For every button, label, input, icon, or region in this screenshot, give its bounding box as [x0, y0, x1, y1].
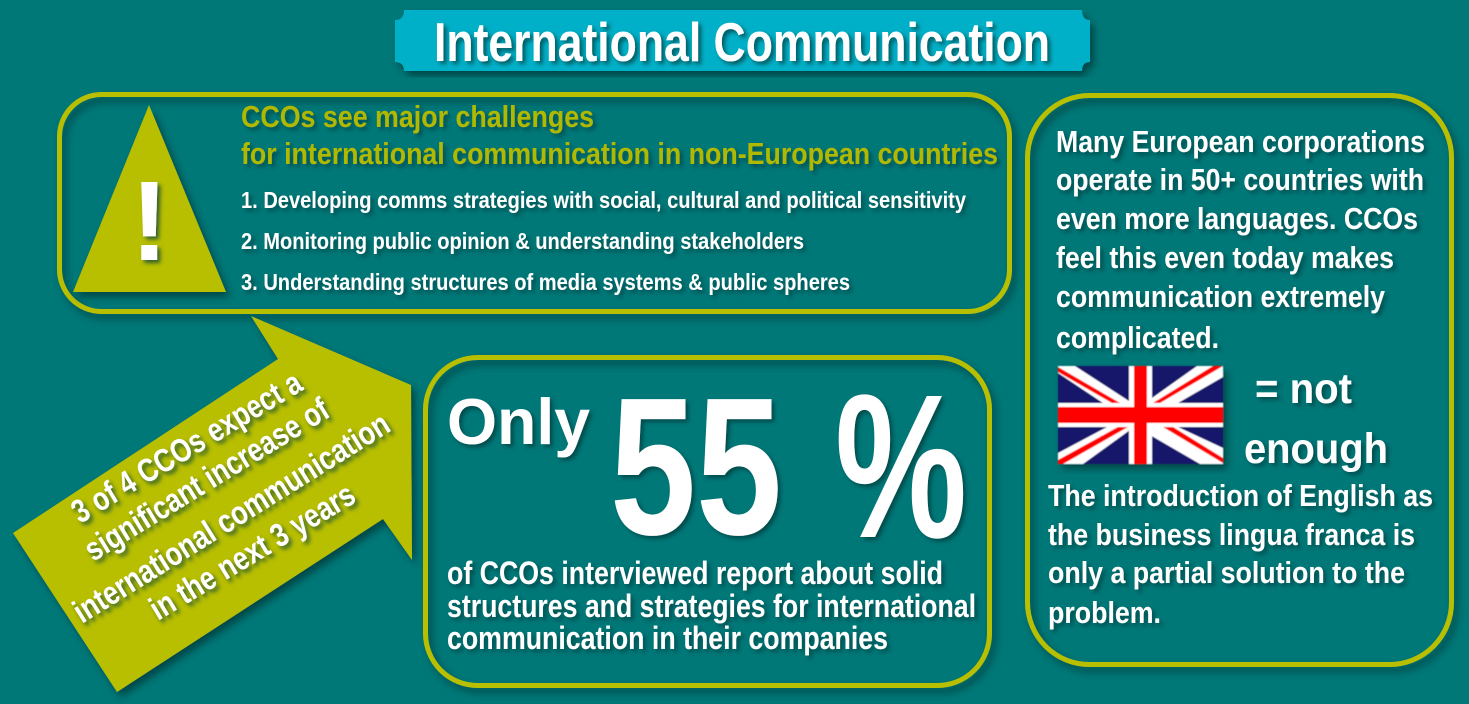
big number: 55	[610, 357, 782, 576]
percent sign: %	[835, 352, 967, 581]
icon: warning triangle	[73, 105, 226, 292]
55 percent description: of CCOs interviewed report about solid	[447, 555, 943, 591]
challenges list: 1. Developing comms strategies with social, cultural and political sensitivity	[241, 187, 966, 213]
only label: Only	[447, 385, 590, 458]
panel: languages	[1028, 96, 1452, 664]
challenges list: 2. Monitoring public opinion & understanding stakeholders	[241, 228, 804, 254]
languages text: even more languages. CCOs	[1056, 201, 1418, 236]
55 percent description	[447, 555, 976, 656]
languages text: complicated.	[1056, 320, 1219, 355]
English text: the business lingua franca is	[1048, 517, 1415, 552]
arrow text: 3 of 4 CCOs expect a	[65, 363, 309, 530]
English text: problem.	[1048, 595, 1161, 630]
languages text: feel this even today makes	[1056, 240, 1394, 275]
title banner: International Communication	[434, 11, 1050, 73]
55 percent description: communication in their companies	[447, 620, 888, 656]
English text: only a partial solution to the	[1048, 555, 1405, 590]
not enough label: enough	[1244, 425, 1388, 473]
panel: challenges	[60, 94, 1010, 312]
English text	[1048, 478, 1433, 630]
challenges heading	[241, 99, 998, 171]
arrow text: international communication	[66, 405, 396, 630]
arrow text: in the next 3 years	[143, 475, 361, 627]
icon: UK flag	[1058, 366, 1223, 464]
challenges heading: CCOs see major challenges	[241, 99, 594, 134]
challenges list: 3. Understanding structures of media systems & public spheres	[241, 269, 850, 295]
not enough label: = not	[1255, 365, 1352, 413]
languages text	[1056, 124, 1425, 355]
challenges list	[241, 187, 966, 295]
challenges heading: for international communication in non-European countries	[241, 136, 998, 171]
arrow callout	[13, 316, 412, 692]
languages text: communication extremely	[1056, 279, 1386, 314]
55 percent description: structures and strategies for international	[447, 588, 976, 624]
arrow text: significant increase of	[77, 390, 336, 568]
panel: 55 percent	[426, 352, 990, 686]
icon: warning triangle: !	[131, 158, 168, 284]
not enough label	[1244, 365, 1388, 473]
